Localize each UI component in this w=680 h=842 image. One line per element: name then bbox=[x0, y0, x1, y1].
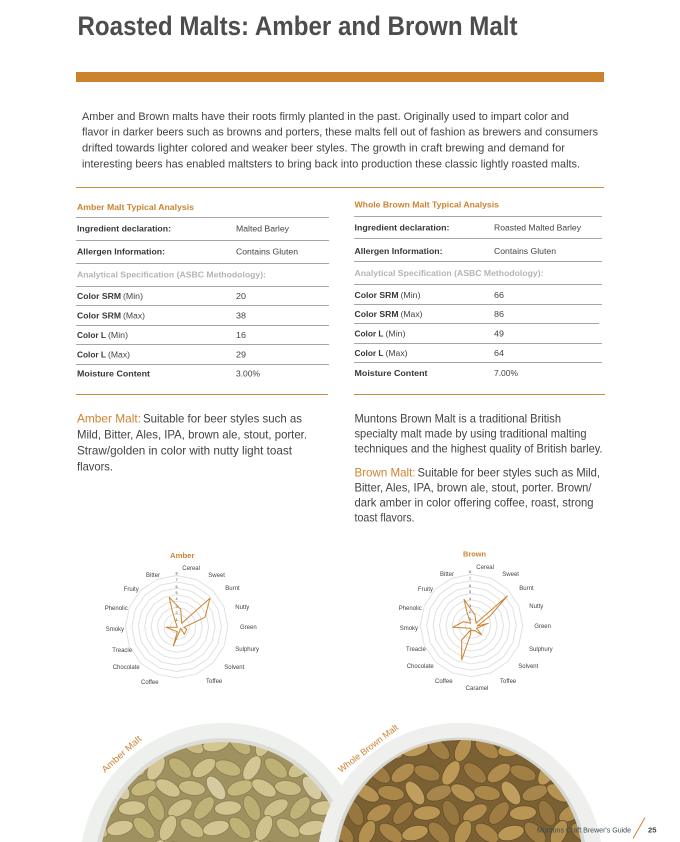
table: amber malt typical analysis: Analytical Specification (ASBC Methodology): bbox=[77, 270, 266, 280]
table: whole brown malt typical analysis: Moisture Content bbox=[354, 368, 428, 378]
radar chart: amber bbox=[105, 551, 259, 686]
radar chart: brown: Cereal bbox=[476, 565, 494, 571]
radar chart: brown: Sulphury bbox=[529, 647, 553, 653]
table: whole brown malt typical analysis: Color L bbox=[354, 348, 384, 358]
text block: brown malt description: dark amber in color offering coffee, roast, strong bbox=[354, 496, 594, 510]
intro paragraph: flavor in darker beers such as browns and porters, these malts fell out of fashion as brewers and consumers bbox=[82, 126, 598, 138]
radar chart: amber: Fruity bbox=[124, 587, 139, 593]
table: whole brown malt typical analysis: 49 bbox=[494, 329, 504, 339]
radar chart: amber: 8 bbox=[176, 571, 178, 575]
table: whole brown malt typical analysis: Ingredient declaration: bbox=[354, 223, 450, 233]
footer: Muntons Craft Brewer's Guide bbox=[537, 826, 631, 834]
footer: 25 bbox=[648, 826, 657, 834]
radar chart: brown: Fruity bbox=[418, 587, 433, 593]
photo: bowl of whole brown malt bbox=[319, 723, 601, 842]
table: whole brown malt typical analysis: Color SRM bbox=[354, 309, 398, 319]
label: amber malt: Amber Malt bbox=[100, 733, 144, 774]
table: amber malt typical analysis: 29 bbox=[236, 350, 246, 360]
intro paragraph: interesting beers has enabled maltsters to bring back into production these classic lightly roasted malts. bbox=[82, 158, 580, 170]
table: whole brown malt typical analysis: (Min) bbox=[386, 329, 406, 339]
table: whole brown malt typical analysis: Roasted Malted Barley bbox=[494, 223, 582, 233]
table: whole brown malt typical analysis: 86 bbox=[494, 309, 504, 319]
text block: amber malt description: Straw/golden in color with nutty light toast bbox=[77, 444, 293, 458]
table: amber malt typical analysis: 20 bbox=[236, 291, 246, 301]
text block: amber malt description: flavors. bbox=[77, 460, 113, 474]
table: amber malt typical analysis: Ingredient declaration: bbox=[77, 224, 171, 234]
table: whole brown malt typical analysis: Analytical Specification (ASBC Methodology): bbox=[354, 268, 544, 278]
radar chart: amber: Bitter bbox=[146, 573, 160, 579]
table: amber malt typical analysis: (Min) bbox=[123, 291, 143, 301]
radar chart: amber: Solvent bbox=[224, 665, 245, 671]
table: amber malt typical analysis: (Min) bbox=[108, 330, 128, 340]
title: Roasted Malts: Amber and Brown Malt bbox=[78, 11, 518, 41]
text block: brown malt description bbox=[354, 412, 602, 525]
radar chart: brown: Phenolic bbox=[399, 606, 422, 612]
radar chart: amber: Treacle bbox=[112, 648, 133, 654]
label: whole brown malt: Whole Brown Malt bbox=[336, 722, 401, 775]
data polygon: brown bbox=[453, 596, 507, 660]
radar chart: amber: 5 bbox=[176, 591, 178, 595]
radar chart: brown: Caramel bbox=[466, 686, 488, 692]
radar chart: amber: Coffee bbox=[141, 680, 159, 686]
radar chart: brown: 8 bbox=[469, 570, 471, 574]
text block: brown malt description: Suitable for beer styles such as Mild, bbox=[418, 466, 600, 480]
table: whole brown malt typical analysis bbox=[354, 200, 605, 394]
radar chart: amber: 4 bbox=[176, 597, 178, 601]
table: amber malt typical analysis: Malted Barley bbox=[236, 224, 290, 234]
photo: bowl of amber malt bbox=[82, 723, 364, 842]
radar chart: amber: 7 bbox=[176, 578, 178, 582]
data polygon: amber bbox=[166, 597, 210, 646]
radar chart: amber: Nutty bbox=[235, 605, 249, 611]
table: amber malt typical analysis bbox=[76, 202, 329, 394]
radar chart: brown: Toffee bbox=[500, 679, 517, 685]
table: amber malt typical analysis: (Max) bbox=[108, 350, 130, 360]
table: whole brown malt typical analysis: (Max) bbox=[400, 309, 423, 319]
radar chart: amber: Toffee bbox=[206, 679, 223, 685]
radar chart: brown: 2 bbox=[469, 610, 471, 614]
table: whole brown malt typical analysis: 64 bbox=[494, 348, 504, 358]
intro paragraph: drifted towards lighter colored and weaker beer styles. The growth in craft brewing and demand for bbox=[82, 142, 565, 154]
table: whole brown malt typical analysis: (Min) bbox=[400, 290, 421, 300]
radar chart: amber: Smoky bbox=[106, 627, 124, 633]
radar chart: brown: Green bbox=[534, 624, 551, 630]
chart title: amber: Amber bbox=[170, 551, 195, 560]
radar chart: amber: Sulphury bbox=[235, 647, 259, 653]
text block: brown malt description: Bitter, Ales, IPA, brown ale, stout, porter. Brown/ bbox=[354, 481, 592, 495]
radar chart: brown: Smoky bbox=[400, 626, 418, 632]
table: amber malt typical analysis: 38 bbox=[236, 310, 246, 320]
radar chart: amber: Cereal bbox=[182, 566, 200, 572]
table: amber malt typical analysis: Color SRM bbox=[77, 310, 121, 320]
radar chart: amber: Phenolic bbox=[105, 606, 128, 612]
radar chart: brown: 1 bbox=[469, 617, 471, 621]
table heading: brown: Whole Brown Malt Typical Analysis bbox=[354, 200, 499, 210]
table: amber malt typical analysis: Color L bbox=[77, 330, 106, 340]
radar chart: amber: 2 bbox=[176, 611, 178, 615]
table: amber malt typical analysis: Allergen Information: bbox=[77, 246, 165, 256]
radar chart: brown: Solvent bbox=[518, 664, 539, 670]
text block: brown malt description: Brown Malt: bbox=[354, 466, 416, 480]
text block: brown malt description: techniques and the highest quality of British barley. bbox=[354, 442, 602, 456]
radar chart: brown: 3 bbox=[469, 604, 471, 608]
table: amber malt typical analysis: 16 bbox=[236, 330, 246, 340]
radar chart: brown: Nutty bbox=[529, 604, 543, 610]
text block: brown malt description: toast flavors. bbox=[354, 511, 414, 525]
radar chart: brown: 5 bbox=[469, 590, 471, 594]
text block: brown malt description: specialty malt made by using traditional malting bbox=[354, 427, 586, 441]
chart title: brown: Brown bbox=[463, 550, 486, 558]
text block: amber malt description: Mild, Bitter, Ales, IPA, brown ale, stout, porter. bbox=[77, 428, 307, 442]
radar chart: amber: 6 bbox=[176, 585, 178, 589]
table: whole brown malt typical analysis: Color L bbox=[354, 329, 384, 339]
table: amber malt typical analysis: 3.00% bbox=[236, 368, 260, 378]
radar chart: brown bbox=[399, 550, 553, 692]
text block: brown malt description: Muntons Brown Malt is a traditional British bbox=[354, 412, 561, 426]
radar chart: brown: 6 bbox=[469, 584, 471, 588]
radar chart: brown: Chocolate bbox=[407, 664, 434, 670]
radar chart: amber: Chocolate bbox=[113, 665, 140, 671]
text block: amber malt description: Suitable for beer styles such as bbox=[143, 412, 302, 426]
radar chart: brown: 7 bbox=[469, 577, 471, 581]
intro paragraph bbox=[82, 111, 598, 170]
radar chart: brown: Treacle bbox=[406, 647, 426, 653]
radar chart: brown: Bitter bbox=[440, 572, 454, 578]
intro paragraph: Amber and Brown malts have their roots firmly planted in the past. Originally used to impart color and bbox=[82, 111, 569, 123]
table: whole brown malt typical analysis: Contains Gluten bbox=[494, 246, 556, 256]
radar chart: brown: Sweet bbox=[502, 572, 519, 578]
table heading: amber: Amber Malt Typical Analysis bbox=[77, 202, 194, 212]
table: whole brown malt typical analysis: Color SRM bbox=[354, 290, 398, 300]
radar chart: amber: Burnt bbox=[225, 586, 240, 592]
text block: amber malt description: Amber Malt: bbox=[77, 412, 141, 426]
table: whole brown malt typical analysis: 7.00% bbox=[494, 368, 518, 378]
table: amber malt typical analysis: Color SRM bbox=[77, 291, 121, 301]
radar chart: brown: Coffee bbox=[435, 679, 453, 685]
radar chart: brown: Burnt bbox=[519, 586, 534, 592]
radar chart: amber: Sweet bbox=[208, 573, 225, 579]
table: amber malt typical analysis: Color L bbox=[77, 350, 106, 360]
radar chart: amber: 1 bbox=[176, 618, 178, 622]
orange header bar bbox=[76, 72, 604, 82]
footer bbox=[537, 818, 657, 838]
radar chart: amber: 3 bbox=[176, 604, 178, 608]
table: whole brown malt typical analysis: 66 bbox=[494, 290, 504, 300]
table: whole brown malt typical analysis: Allergen Information: bbox=[354, 246, 443, 256]
radar chart: brown: 4 bbox=[469, 597, 471, 601]
table: amber malt typical analysis: Contains Gluten bbox=[236, 246, 298, 256]
table: amber malt typical analysis: Moisture Content bbox=[77, 368, 150, 378]
radar chart: amber: Green bbox=[240, 625, 257, 631]
table: whole brown malt typical analysis: (Max) bbox=[386, 348, 408, 358]
text block: amber malt description bbox=[77, 412, 307, 474]
table: amber malt typical analysis: (Max) bbox=[123, 310, 145, 320]
